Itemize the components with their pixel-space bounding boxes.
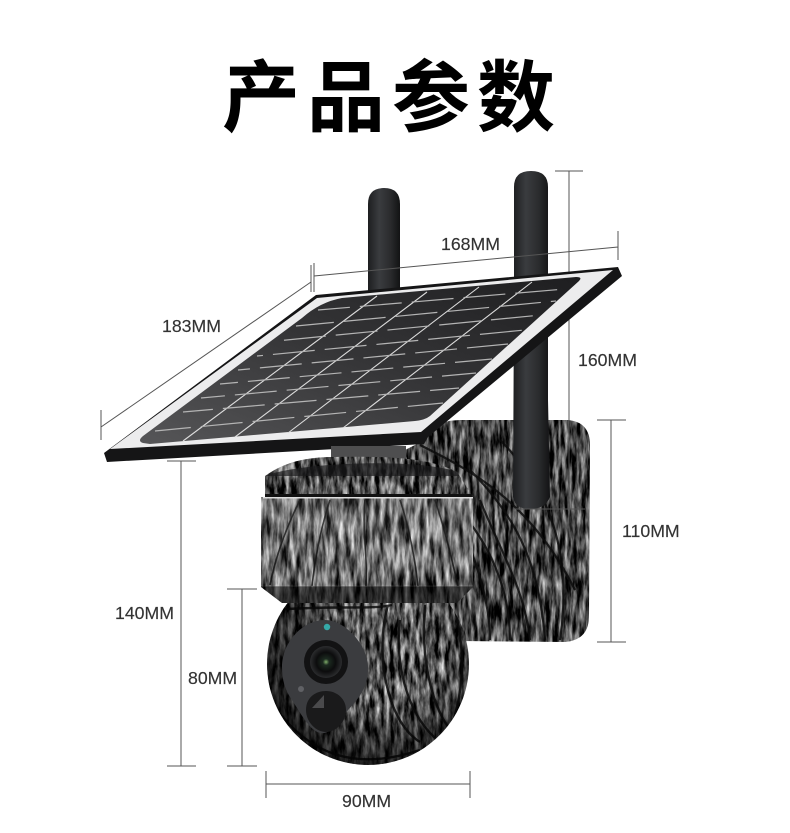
wall mount plate with wood texture <box>400 415 595 647</box>
dimension: 80MM: 80MM <box>188 668 237 688</box>
panel white border <box>110 270 613 449</box>
dimension: 110MM: 110MM <box>622 521 680 541</box>
camera face plate <box>282 620 368 733</box>
antenna: right <box>513 171 550 509</box>
camera head cap <box>265 456 472 497</box>
title: 产品参数 <box>222 54 562 142</box>
panel frame <box>104 267 622 462</box>
dimension: 168MM <box>314 231 618 292</box>
column lines <box>183 282 532 441</box>
camera lens <box>304 640 348 684</box>
dimension: 183MM: 183MM <box>162 316 221 336</box>
solar panel <box>104 267 622 462</box>
small sensor <box>298 686 304 692</box>
panel mount stem <box>331 446 406 460</box>
dimension: 90MM: 90MM <box>342 791 391 811</box>
dimension: 110MM <box>597 420 680 642</box>
dimension: 90MM <box>266 771 470 811</box>
dimension: 140MM: 140MM <box>115 603 174 623</box>
dimension: 140MM <box>115 461 196 766</box>
dimension: 80MM <box>188 589 257 766</box>
LED indicator <box>324 624 330 630</box>
dimension: 168MM: 168MM <box>441 234 500 254</box>
camera ball <box>267 603 469 765</box>
panel cells <box>140 277 580 444</box>
dimension: 160MM <box>513 171 637 509</box>
cell bus lines <box>155 289 565 431</box>
PIR sensor <box>306 691 346 732</box>
dimension: 183MM <box>101 265 311 440</box>
dimension: 160MM: 160MM <box>578 350 637 370</box>
camera head ring <box>258 495 478 605</box>
antenna: left <box>368 188 400 300</box>
